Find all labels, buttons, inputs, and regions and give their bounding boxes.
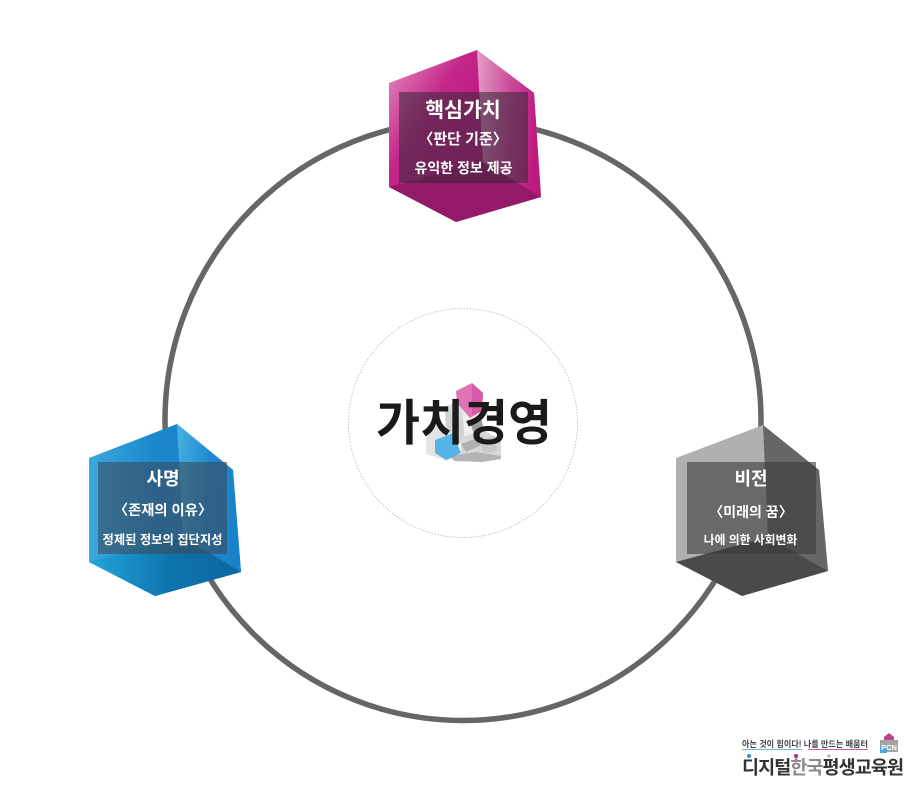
panel: vision gem [676, 425, 828, 596]
text: vision description: 나에 의한 사회변화 [704, 533, 797, 547]
logo tagline: 아는 것이 힘이다! 나를 만드는 배움터 [742, 738, 868, 749]
panel: mission gem [89, 424, 241, 596]
dotted inner circle [348, 308, 578, 538]
panel: core values gem [389, 50, 541, 222]
logo: Digital Korea Lifelong Education Institute [742, 733, 904, 778]
icon: logo cube [880, 733, 898, 753]
subheading: reason for existence: 〈존재의 이유〉 [114, 502, 212, 519]
text: core values description: 유익한 정보 제공 [415, 160, 513, 176]
logo wordmark: 디지털한국평생교육원 [742, 757, 904, 778]
icon: central stacked cubes [426, 383, 501, 462]
heading: core values: 핵심가치 [425, 99, 501, 122]
title: 가치경영 [376, 397, 552, 451]
icon: logo cube: PCN [881, 743, 897, 752]
text: mission description: 정제된 정보의 집단지성 [103, 532, 222, 547]
heading: mission: 사명 [146, 469, 180, 489]
logo dots [747, 754, 830, 758]
subheading: judgment criteria: 〈판단 기준〉 [418, 131, 508, 148]
heading: vision: 비전 [734, 469, 768, 489]
main cycle ring [165, 120, 761, 720]
subheading: dream of the future: 〈미래의 꿈〉 [709, 504, 793, 520]
